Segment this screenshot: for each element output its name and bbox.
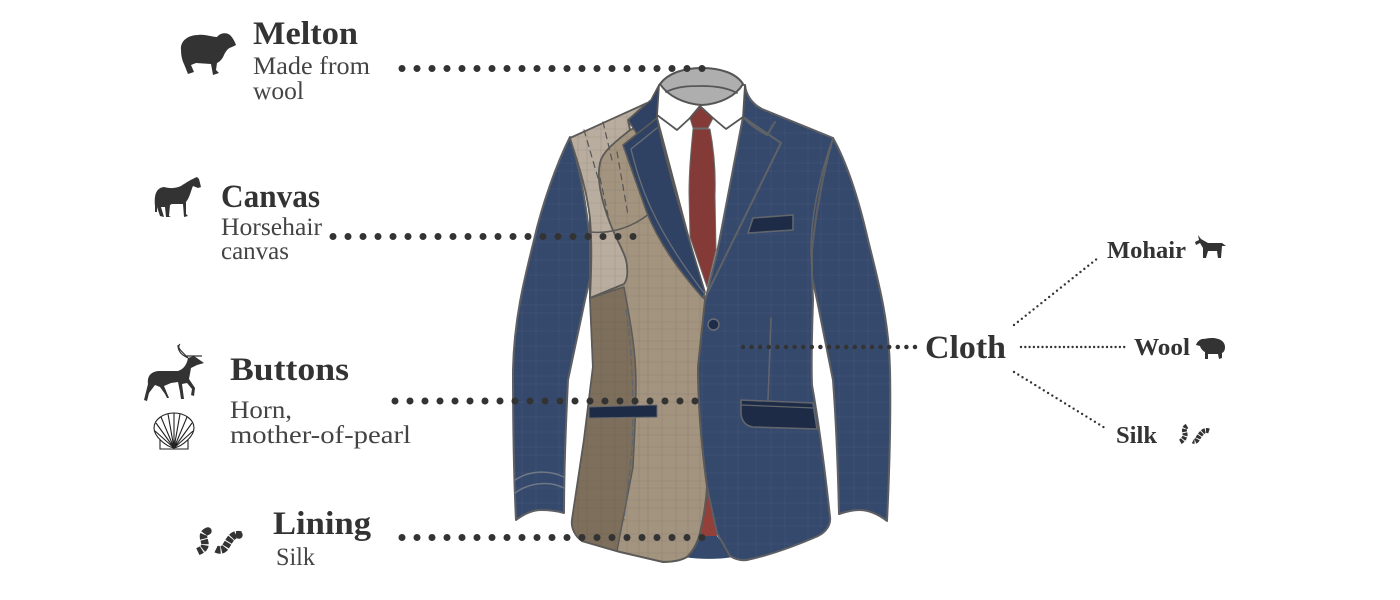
- melton text: [253, 16, 371, 105]
- icon: shell: [154, 413, 194, 449]
- lining text: Lining: [273, 506, 372, 542]
- left sleeve: [513, 137, 592, 520]
- leader: canvas: [333, 233, 634, 240]
- right sleeve: [812, 138, 890, 521]
- leader: cloth: [743, 345, 916, 349]
- left hip pocket: [589, 405, 657, 418]
- leader: cloth to wool: [1021, 346, 1128, 348]
- left lapel: [623, 85, 705, 298]
- cloth heading: Cloth: [925, 330, 1006, 366]
- canvas text: Horsehair: [221, 214, 323, 241]
- canvas text: canvas: [221, 238, 289, 265]
- buttons text: mother-of-pearl: [230, 422, 411, 449]
- front button: [708, 319, 719, 330]
- left jacket dark side panel: [572, 287, 636, 551]
- lining at jacket hem: [683, 487, 733, 559]
- canvas text: Canvas: [221, 179, 320, 215]
- buttons text: Horn,: [230, 397, 292, 424]
- icon: small silkworms: [1180, 426, 1209, 442]
- horsehair canvas panel: [570, 103, 650, 298]
- leader: melton: [402, 65, 703, 72]
- melton text: Made from: [253, 53, 371, 80]
- icon: silkworms: [197, 527, 243, 552]
- leader: cloth to mohair: [1014, 258, 1098, 325]
- wool label: Wool: [1134, 335, 1190, 361]
- mohair label: Mohair: [1107, 238, 1186, 264]
- melton text: Melton: [253, 16, 358, 52]
- right hip pocket: [741, 400, 817, 429]
- canvas text: [221, 179, 323, 265]
- buttons text: Buttons: [230, 352, 349, 388]
- leader: cloth to silk: [1014, 372, 1105, 428]
- icon: horse: [155, 177, 201, 217]
- melton text: wool: [253, 78, 304, 105]
- chest pocket: [748, 215, 793, 233]
- buttons text: [230, 352, 411, 449]
- shirt: [657, 95, 745, 290]
- illustration: jacket: [513, 68, 890, 562]
- leader: lining: [402, 534, 703, 541]
- icon: sheep: [181, 33, 236, 75]
- lining text: Silk: [276, 544, 315, 571]
- leader: buttons: [395, 398, 696, 404]
- icon: small sheep: [1196, 338, 1225, 359]
- side dart seam: [768, 318, 771, 400]
- icon: deer: [144, 344, 204, 401]
- right jacket front: [698, 85, 833, 560]
- icon: goat: [1195, 235, 1226, 258]
- tie: [689, 107, 716, 287]
- lining text: [273, 506, 372, 571]
- left jacket tan panel: [572, 118, 707, 562]
- shirt collar: [657, 85, 745, 130]
- neck opening: [660, 68, 743, 105]
- silk label: Silk: [1116, 423, 1158, 449]
